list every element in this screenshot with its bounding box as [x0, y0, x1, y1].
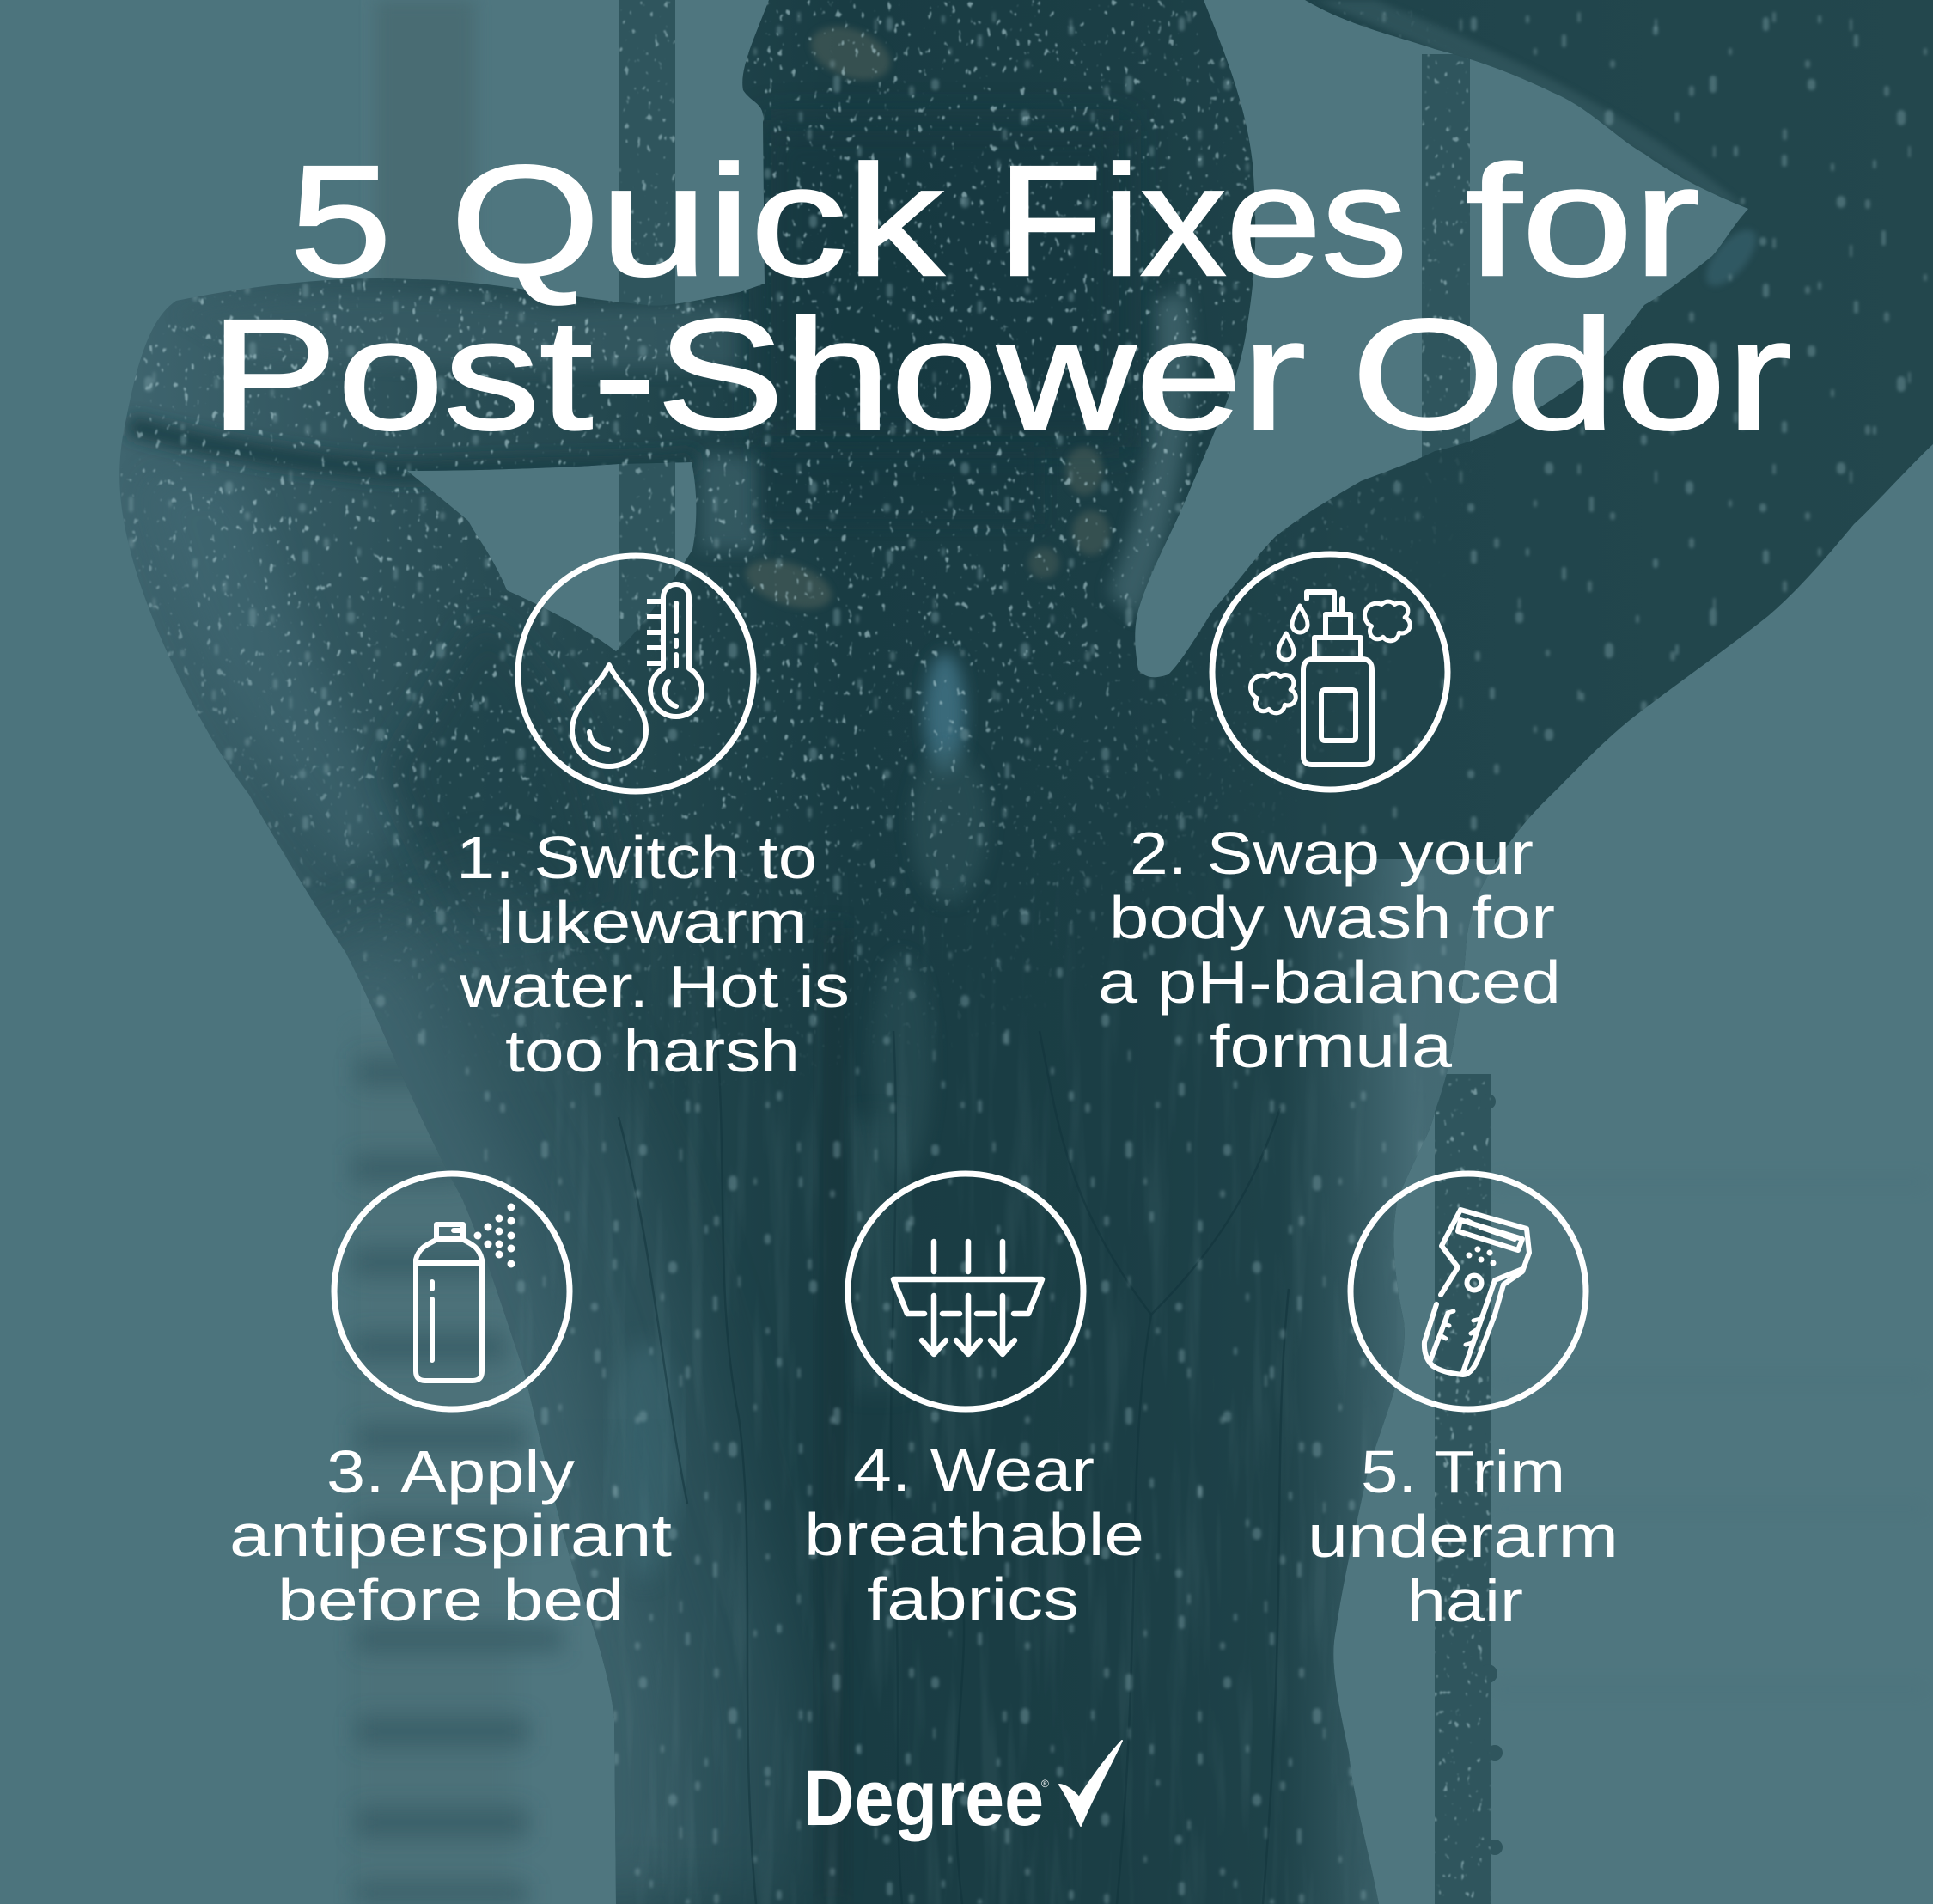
- title: 5: [290, 132, 392, 308]
- foam clouds: [1250, 601, 1410, 713]
- label 5: hair: [1407, 1567, 1523, 1634]
- label 1: [456, 824, 850, 1084]
- label 1: 1. Switch to: [456, 824, 817, 891]
- label 5: [1308, 1438, 1619, 1634]
- trimmer body: [1424, 1210, 1529, 1375]
- title: [210, 132, 1792, 462]
- title: for: [1466, 132, 1700, 308]
- inner lines: [1430, 1269, 1522, 1372]
- can: [416, 1224, 482, 1381]
- centre and right shower pipes: [619, 0, 1503, 1904]
- fingers: [740, 16, 1110, 618]
- label 5: 5. Trim: [1361, 1438, 1565, 1505]
- title: Fixes: [997, 132, 1407, 308]
- label 3: [229, 1438, 672, 1633]
- right faint wall bands: [1495, 1177, 1924, 1694]
- label 4: 4. Wear: [853, 1437, 1095, 1504]
- neck and head highlights: [700, 0, 1765, 619]
- thermometer: [647, 584, 702, 717]
- icon: water drop and thermometer: [518, 556, 753, 791]
- button and dots: [1467, 1275, 1481, 1291]
- left blurred vertical pipe: [352, 0, 515, 1904]
- droplets on pipes: [619, 0, 1491, 1904]
- skin vein lines: [619, 988, 1289, 1904]
- water drop: [572, 665, 646, 766]
- label 5: underarm: [1308, 1503, 1619, 1570]
- label 4: [804, 1437, 1144, 1632]
- icon: electric trimmer: [1351, 1174, 1586, 1409]
- bottle: [1303, 592, 1372, 765]
- spray mist: [474, 1203, 515, 1268]
- soap drops: [1278, 606, 1308, 660]
- arrows: [922, 1296, 1015, 1354]
- label 1: too harsh: [505, 1017, 800, 1084]
- label 2: 2. Swap your: [1130, 820, 1534, 887]
- grip ticks: [1442, 1311, 1480, 1345]
- left blurred rail bars: [352, 1059, 563, 1904]
- icon: logo check mark: [1059, 1741, 1122, 1826]
- back highlights: [345, 653, 1495, 1904]
- title: Quick: [450, 132, 944, 308]
- label 1: water. Hot is: [459, 953, 850, 1020]
- skin streak texture: [692, 1174, 1281, 1904]
- left arm shading: [129, 295, 739, 937]
- label 2: body wash for: [1109, 884, 1555, 951]
- logo: Degree: ®: [1041, 1778, 1049, 1790]
- label 3: before bed: [277, 1566, 624, 1633]
- logo: Degree: Degree: [803, 1754, 1044, 1842]
- label 2: [1098, 820, 1561, 1080]
- label 4: breathable: [804, 1501, 1144, 1568]
- icon: antiperspirant spray can: [334, 1174, 570, 1409]
- title: Post-Shower: [210, 286, 1306, 462]
- icon: pump bottle with foam: [1212, 554, 1448, 790]
- fabric: [893, 1279, 1042, 1314]
- blade: [1458, 1220, 1522, 1250]
- label 3: antiperspirant: [229, 1502, 672, 1569]
- label 2: a pH-balanced: [1098, 949, 1561, 1016]
- title: Odor: [1351, 286, 1792, 462]
- label 2: formula: [1210, 1013, 1452, 1080]
- air lines: [934, 1242, 1003, 1272]
- icon: breathable fabric: [848, 1174, 1083, 1409]
- label 3: 3. Apply: [326, 1438, 575, 1505]
- label 1: lukewarm: [498, 888, 808, 955]
- label 4: fabrics: [867, 1565, 1079, 1632]
